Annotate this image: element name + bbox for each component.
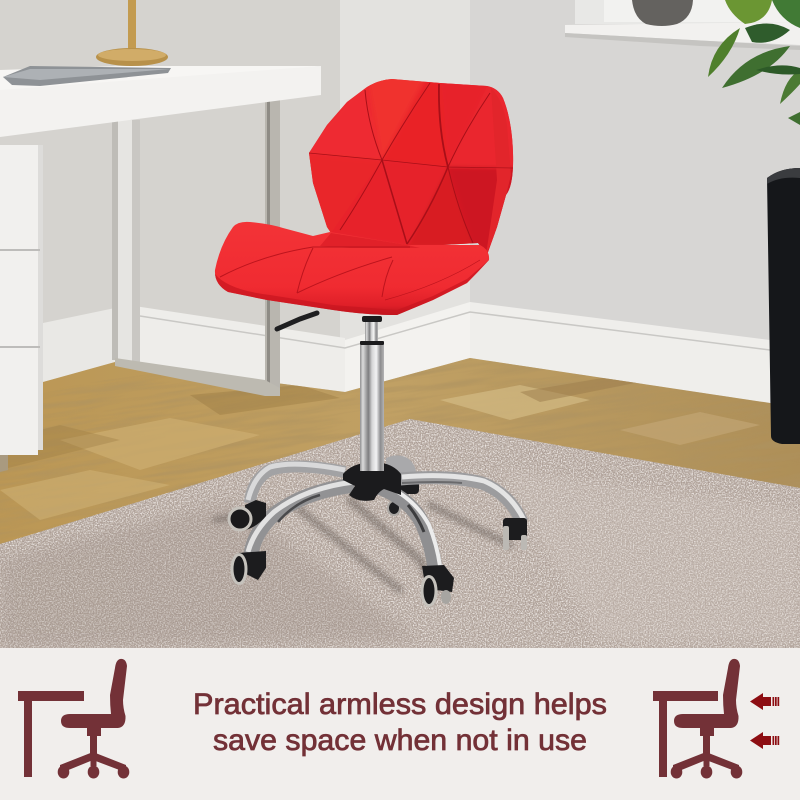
background: room walls [0,0,800,420]
chair backrest [309,79,514,253]
chair silhouette [58,659,129,778]
chair silhouette tucked [671,659,742,778]
chair five-star base [229,313,527,606]
icon: chair away from desk [18,659,129,778]
upper piston [365,322,378,343]
leg right [400,476,524,522]
arrow: upper push left [750,693,779,710]
arrow: lower push left [750,732,779,749]
bottom caption band [0,648,800,800]
desk silhouette tucked [653,691,718,777]
leg front left [248,482,354,555]
caster right [503,518,527,550]
seat mount [362,316,382,322]
caster left front [232,551,266,584]
rug [0,415,800,650]
black bin [767,168,800,444]
plant leaves [708,0,800,125]
desk top [0,66,321,137]
gas lift tube [360,345,384,471]
height lever [277,313,317,329]
icon: chair tucked under desk [653,659,742,778]
caption text: save space when not in use [213,724,587,757]
caption text [193,688,607,757]
window sill with pot [565,0,800,50]
caption text: Practical armless design helps [193,688,607,721]
desk drawers [0,145,43,472]
chair [210,70,527,606]
caster front [422,565,454,606]
hub [343,462,401,501]
seat tufting seams [220,247,480,300]
lamp [96,0,168,66]
rear caster [386,455,419,515]
chair shadow on rug [215,500,510,590]
chair seat [210,222,489,320]
collar [360,341,384,345]
backrest tufting seams [309,83,513,244]
laptop [3,66,171,86]
baseboards [43,302,770,403]
wood floor [0,358,800,544]
leg front right [379,484,440,568]
caster left rear [229,500,266,530]
desk leg frame [112,98,280,396]
leg back left [248,464,345,503]
desk silhouette [18,691,84,777]
